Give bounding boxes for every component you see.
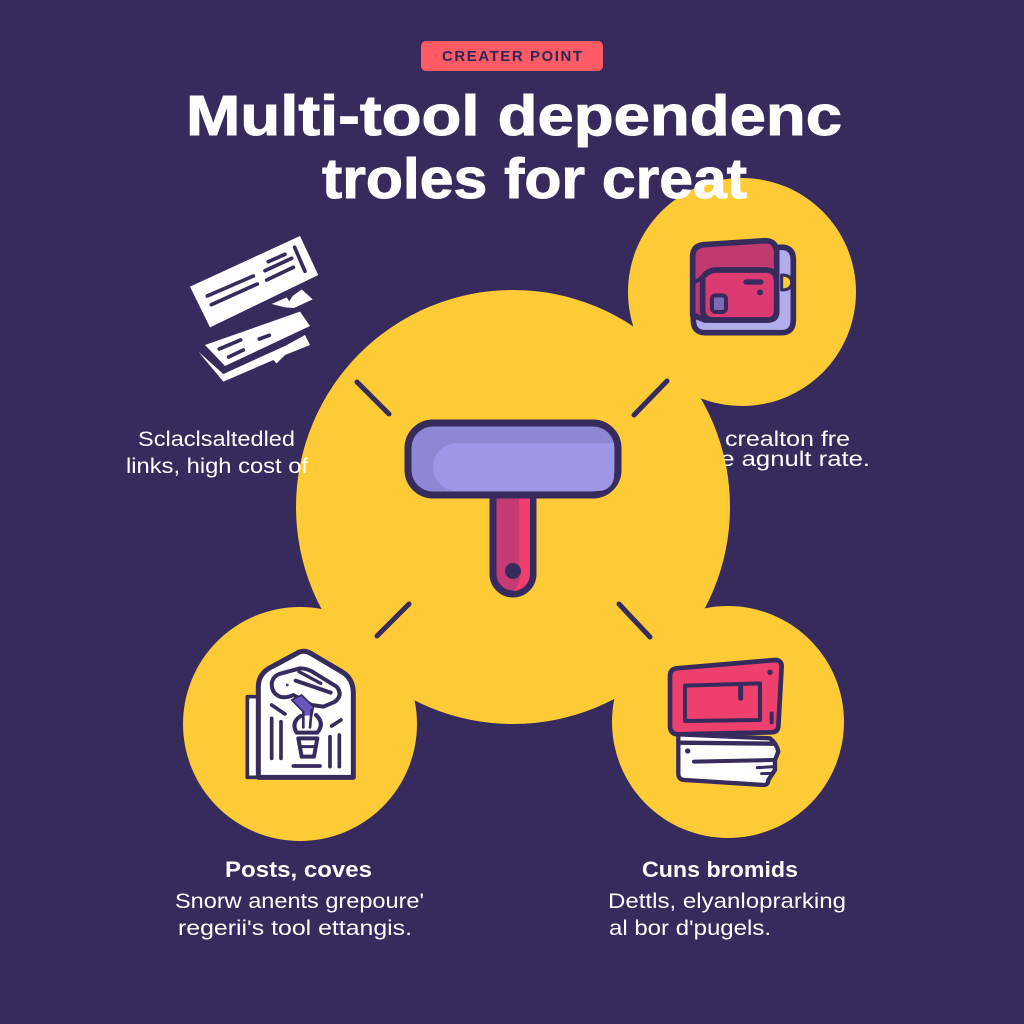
connector ticks [357, 381, 667, 637]
caption: posts, coves: Posts, coves [225, 857, 372, 882]
title [186, 84, 842, 211]
text: left description [126, 428, 308, 478]
title: Multi-tool dependenc [186, 84, 842, 148]
icon: paper tickets [190, 236, 318, 382]
red card [670, 660, 782, 734]
text: left description: links, high cost of [126, 455, 308, 478]
caption: cuns bromids [608, 857, 846, 940]
badge: creater point [421, 41, 603, 71]
top right yellow circle [628, 178, 856, 406]
white stack [678, 734, 778, 785]
bottom right yellow circle [612, 606, 844, 838]
icon: wallet [693, 241, 793, 333]
icon: red card over book [670, 660, 782, 785]
caption: cuns bromids: Cuns bromids [642, 857, 798, 882]
icon: zipper document [247, 651, 353, 777]
bottom left yellow circle [183, 607, 417, 841]
roller handle [493, 494, 533, 594]
text: right description: ne agnult rate. [706, 448, 870, 471]
icon: central roller tool [408, 423, 618, 594]
text: left description: Sclaclsaltedled [138, 428, 295, 451]
roller head [408, 423, 618, 495]
title: troles for creat [322, 147, 747, 211]
central yellow circle [296, 290, 730, 724]
caption: posts, coves: regerii's tool ettangis. [178, 917, 412, 940]
text: right description [706, 428, 870, 471]
caption: posts, coves: Snorw anents grepoure' [175, 890, 424, 913]
caption: cuns bromids: Dettls, elyanloprarking [608, 890, 846, 913]
badge: creater point: CREATER POINT [442, 48, 582, 65]
book details [694, 760, 773, 762]
caption: posts, coves [175, 857, 424, 940]
text: right description: crealton fre [725, 428, 850, 451]
caption: cuns bromids: al bor d'pugels. [609, 917, 771, 940]
